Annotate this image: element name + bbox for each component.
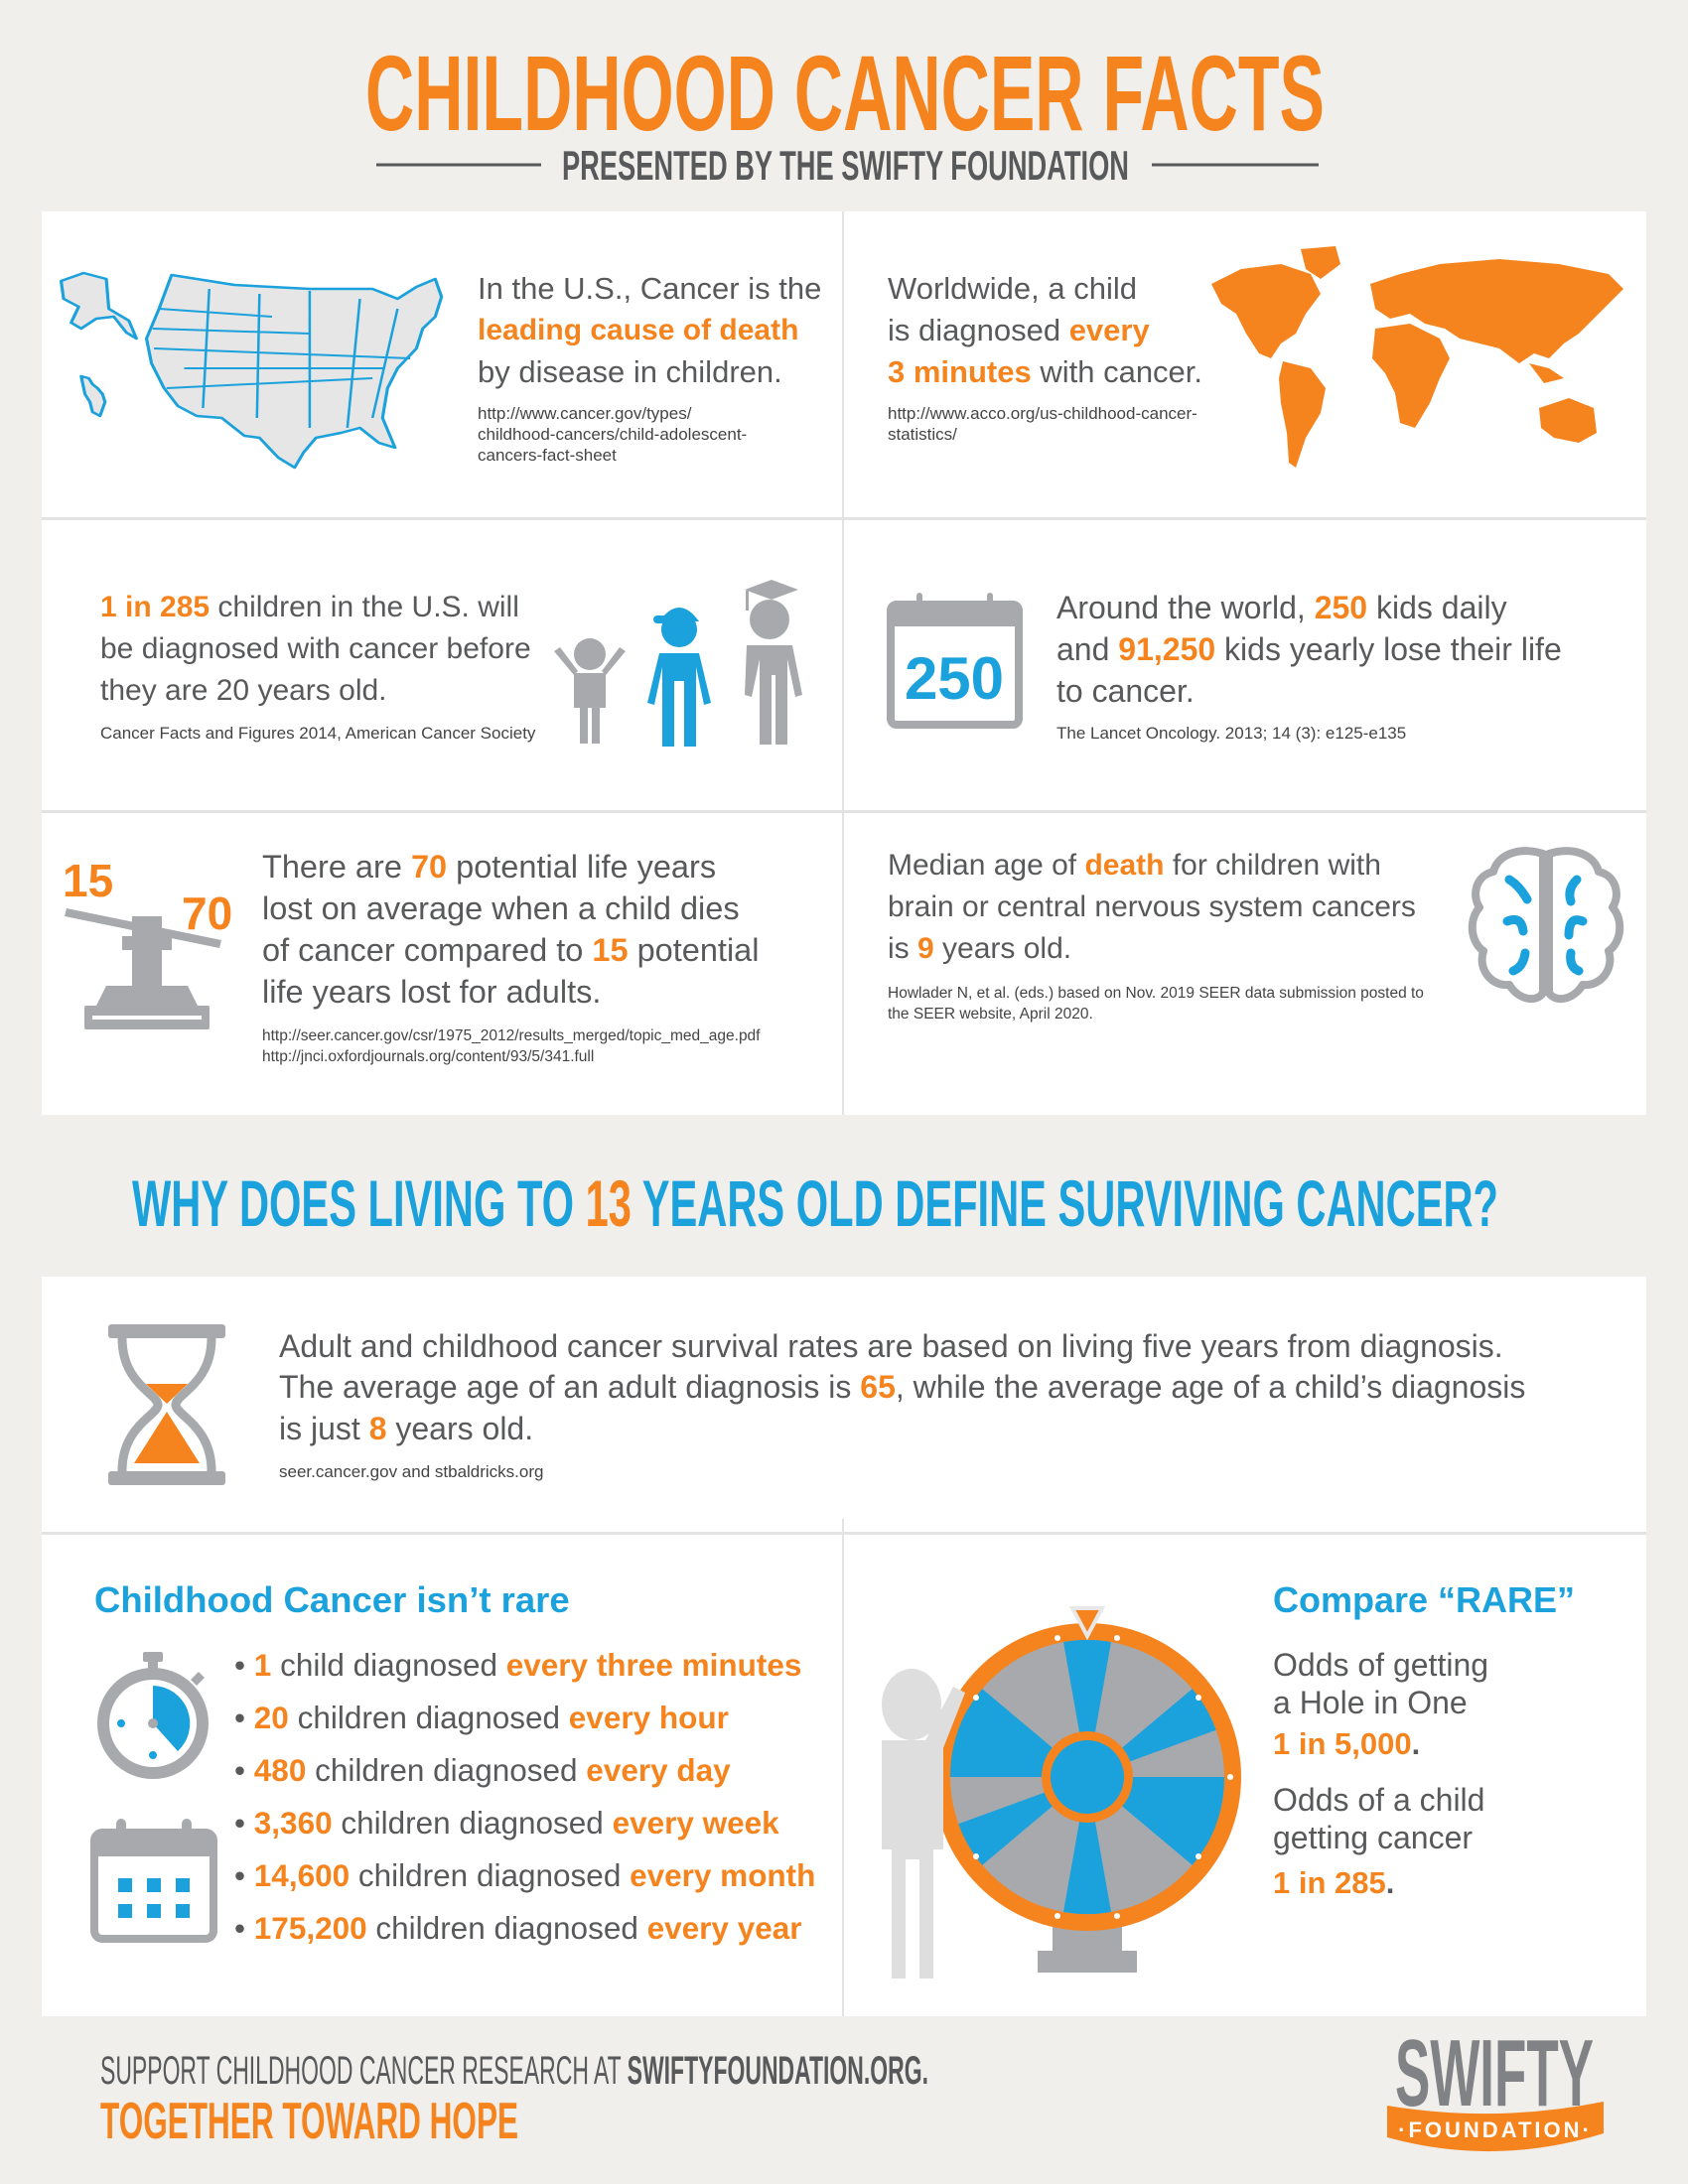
text: compare rare: Odds of a child (1273, 1782, 1484, 1818)
panel: bottom halves (42, 1535, 1646, 2016)
text: compare rare: 1 in 285. (1273, 1865, 1394, 1900)
list: diagnosis rates: • 1 child diagnosed every three minutes (234, 1647, 801, 1683)
icon: hourglass (108, 1324, 225, 1485)
text: 250 kids: to cancer. (1056, 673, 1195, 709)
text: 1 in 285: Cancer Facts and Figures 2014, American Cancer Society (100, 724, 535, 743)
icon: calendar 250: 250 (905, 645, 1004, 712)
text: 250 kids: The Lancet Oncology. 2013; 14 (3): e125-e135 (1056, 724, 1406, 743)
text: survival rates (279, 1328, 1525, 1481)
text: compare rare: 1 in 5,000. (1273, 1726, 1420, 1761)
icon: scale 15 70: 70 (182, 887, 232, 939)
heading: isn't rare: Childhood Cancer isn’t rare (94, 1579, 570, 1620)
list: diagnosis rates (234, 1647, 815, 1946)
text: compare rare (1273, 1579, 1575, 1900)
text: worldwide: http://www.acco.org/us-childhood-cancer- (888, 404, 1197, 423)
text: 70 life years: life years lost for adults. (262, 974, 601, 1010)
text: brain cancers: Howlader N, et al. (eds.) based on Nov. 2019 SEER data submission posted to (888, 985, 1424, 1002)
icon: calendar 250 (887, 593, 1023, 729)
text: brain cancers: Median age of death for children with (888, 849, 1381, 882)
footer text: TOGETHER TOWARD HOPE (100, 2093, 518, 2150)
list: diagnosis rates: • 20 children diagnosed every hour (234, 1700, 729, 1735)
text: 70 life years (262, 849, 761, 1065)
text: compare rare: getting cancer (1273, 1820, 1473, 1855)
text: worldwide (888, 271, 1202, 444)
icon: calendar grid (90, 1819, 217, 1943)
text: 1 in 285: 1 in 285 children in the U.S. will (100, 591, 519, 623)
list: diagnosis rates: • 175,200 children diagnosed every year (234, 1910, 802, 1946)
icon: US map (60, 272, 443, 469)
icon: world map (1211, 246, 1623, 468)
text: brain cancers (888, 849, 1424, 1023)
text: 250 kids: Around the world, 250 kids daily (1056, 590, 1507, 625)
list: diagnosis rates: • 3,360 children diagnosed every week (234, 1805, 779, 1841)
icon: children (554, 580, 802, 747)
icon: brain (1468, 847, 1624, 1003)
text: worldwide: is diagnosed every (888, 313, 1150, 347)
icon: stopwatch (97, 1652, 209, 1779)
text: survival rates: seer.cancer.gov and stbaldricks.org (279, 1462, 543, 1481)
icon: scale 15 70 (63, 857, 232, 1029)
footer text (100, 2049, 928, 2150)
logo: swifty foundation: ·FOUNDATION· (1398, 2117, 1593, 2142)
text: worldwide: statistics/ (888, 425, 957, 444)
text: survival rates: Adult and childhood cancer survival rates are based on living five years from diagnosis. (279, 1328, 1503, 1364)
text: brain cancers: is 9 years old. (888, 932, 1071, 965)
text: 70 life years: http://jnci.oxfordjournals.org/content/93/5/341.full (262, 1048, 594, 1065)
text: US cancer: http://www.cancer.gov/types/ (478, 404, 691, 423)
text: 250 kids (1056, 590, 1562, 743)
text: 1 in 285 (100, 591, 536, 743)
text: US cancer: childhood-cancers/child-adolescent- (478, 425, 747, 444)
panel: facts grid (42, 211, 1646, 1115)
text: 70 life years: http://seer.cancer.gov/csr/1975_2012/results_merged/topic_med_age.pdf (262, 1027, 761, 1044)
text: 70 life years: of cancer compared to 15 potential (262, 932, 759, 968)
text: 250 kids: and 91,250 kids yearly lose their life (1056, 631, 1562, 667)
list: diagnosis rates: • 14,600 children diagnosed every month (234, 1857, 815, 1893)
text: brain cancers: the SEER website, April 2020. (888, 1006, 1093, 1023)
text: brain cancers: brain or central nervous system cancers (888, 890, 1416, 923)
text: survival rates: The average age of an adult diagnosis is 65, while the average age of a child’s diagnosis (279, 1369, 1525, 1405)
text: compare rare: a Hole in One (1273, 1685, 1468, 1720)
title: PRESENTED BY THE SWIFTY FOUNDATION (562, 142, 1129, 189)
text: worldwide: 3 minutes with cancer. (888, 354, 1202, 389)
text: 1 in 285: they are 20 years old. (100, 674, 387, 707)
title (365, 33, 1325, 189)
text: survival rates: is just 8 years old. (279, 1411, 533, 1446)
text: 1 in 285: be diagnosed with cancer before (100, 632, 531, 665)
text: 70 life years: lost on average when a child dies (262, 890, 740, 926)
list: diagnosis rates: • 480 children diagnosed every day (234, 1752, 731, 1788)
text: 70 life years: There are 70 potential life years (262, 849, 716, 885)
text: worldwide: Worldwide, a child (888, 271, 1137, 306)
text: compare rare: Compare “RARE” (1273, 1579, 1575, 1620)
text: US cancer: leading cause of death (478, 314, 798, 346)
icon: prize wheel with person (882, 1606, 1241, 1979)
text: US cancer (478, 271, 821, 465)
text: US cancer: cancers-fact-sheet (478, 446, 617, 465)
panel: survival rates (42, 1277, 1646, 1532)
text: US cancer: by disease in children. (478, 354, 782, 389)
text: compare rare: Odds of getting (1273, 1647, 1488, 1683)
text: US cancer: In the U.S., Cancer is the (478, 271, 821, 306)
